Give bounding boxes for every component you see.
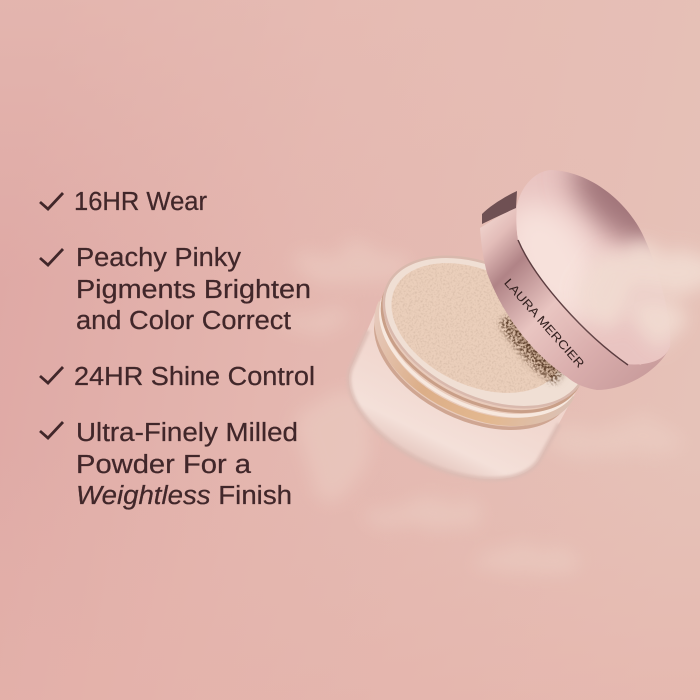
lid brand text: LAURA MERCIER (501, 276, 587, 371)
lid top face (516, 170, 670, 364)
product: loose powder jar (349, 170, 668, 478)
clear rim (359, 226, 611, 438)
powder cloud behind jar (281, 245, 675, 572)
feature list (40, 188, 315, 510)
rose gold lid (480, 170, 668, 390)
item: Peachy Pinky Pigments: Peachy Pinky (76, 244, 241, 272)
jar thread rings (350, 253, 597, 459)
lid shadow on powder (507, 317, 560, 376)
powder cloud over lid (577, 242, 700, 346)
powder surface (370, 237, 584, 419)
item: Ultra-Finely Milled Powder: Weightless Finish (76, 482, 292, 510)
lid rim line (518, 240, 628, 365)
frosted jar body (325, 298, 575, 509)
dark inner edge of lid (482, 191, 517, 224)
item: Peachy Pinky Pigments: and Color Correct (76, 307, 291, 335)
icon: check mark (40, 193, 63, 209)
item: Ultra-Finely Milled Powder (40, 419, 298, 510)
icon: check mark (40, 367, 63, 383)
icon: check mark (40, 422, 63, 438)
item: 16HR Wear: 16HR Wear (74, 188, 208, 216)
jar base (325, 226, 611, 509)
lid side band (480, 205, 670, 390)
item: 24HR Shine Control: 24HR Shine Control (74, 363, 315, 391)
item: Peachy Pinky Pigments (40, 244, 311, 335)
item: Ultra-Finely Milled Powder: Ultra-Finely Milled (76, 419, 298, 447)
item: Ultra-Finely Milled Powder: Powder For a (76, 451, 252, 479)
item: Peachy Pinky Pigments: Pigments Brighten (76, 276, 311, 304)
icon: check mark (40, 249, 63, 265)
